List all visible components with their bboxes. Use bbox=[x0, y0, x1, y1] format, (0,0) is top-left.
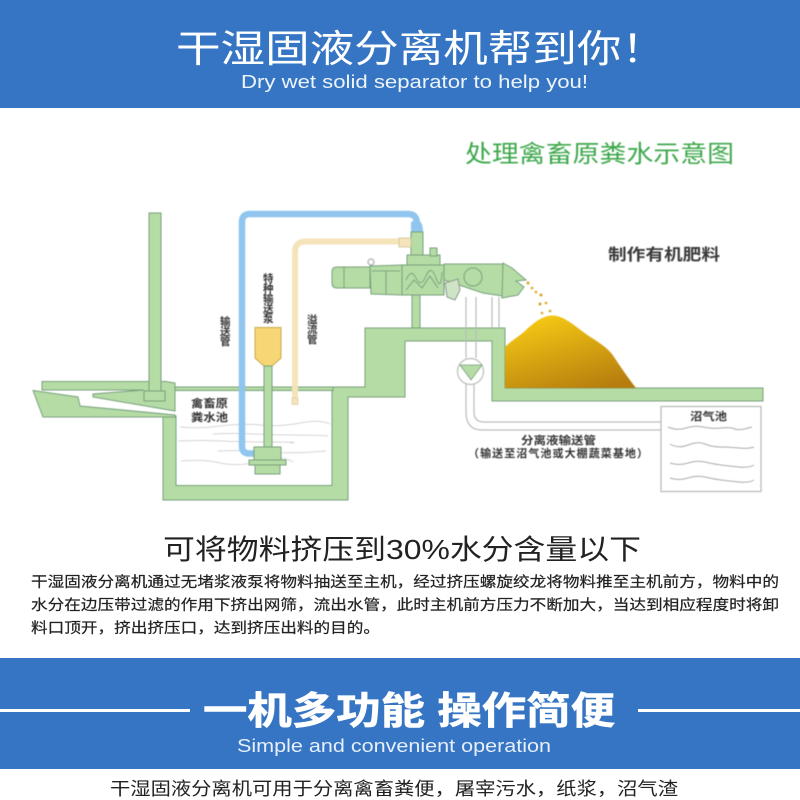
label: delivery pipe bbox=[220, 315, 231, 348]
water waves in tank bbox=[178, 421, 330, 465]
overflow pipe end cap bbox=[292, 398, 298, 404]
gearbox bbox=[370, 265, 402, 295]
biogas tank label: 沼气池 bbox=[690, 409, 727, 423]
description paragraph bbox=[31, 573, 779, 637]
footer text: 干湿固液分离机可用于分离禽畜粪便，屠宰污水，纸浆，沼气渣 bbox=[110, 779, 678, 799]
machine stand bbox=[412, 292, 420, 328]
motor band bbox=[343, 267, 345, 288]
description paragraph: 干湿固液分离机通过无堵浆液泵将物料抽送至主机，经过挤压螺旋绞龙将物料推至主机前方，物料中的 bbox=[31, 573, 779, 591]
label: special delivery pump: 送 bbox=[263, 302, 274, 315]
label: delivery pipe: 管 bbox=[220, 335, 230, 348]
tank and platform structure bbox=[163, 328, 763, 500]
label: special delivery pump bbox=[263, 272, 274, 325]
screw flights bbox=[406, 270, 442, 290]
label: separated liquid pipe: 分离液输送管 bbox=[521, 433, 596, 447]
pump foot bbox=[255, 465, 280, 474]
biogas tank bbox=[661, 406, 761, 492]
discharge head bbox=[502, 263, 526, 298]
delivery pump bbox=[249, 328, 286, 474]
banner subtitle: Simple and convenient operation bbox=[237, 736, 551, 756]
label: manure water tank bbox=[191, 396, 228, 424]
banner rule right bbox=[638, 709, 800, 712]
pump shaft bbox=[264, 366, 272, 447]
lower hopper bbox=[445, 279, 460, 300]
banner rule left bbox=[0, 709, 190, 712]
feed inlet bbox=[411, 232, 423, 256]
pump motor bbox=[254, 447, 281, 460]
label: make organic fertilizer: 制作有机肥料 bbox=[608, 246, 720, 264]
label: overflow pipe: 溢 bbox=[307, 313, 318, 326]
drive motor bbox=[332, 267, 370, 288]
header banner bbox=[0, 0, 800, 108]
pump flange bbox=[249, 460, 286, 465]
label: overflow pipe bbox=[307, 313, 318, 346]
tube opening bbox=[464, 268, 482, 286]
diagram title: 处理禽畜原粪水示意图 bbox=[465, 141, 734, 168]
label: delivery pipe: 输 bbox=[220, 315, 231, 328]
fertilizer pile bbox=[505, 316, 636, 388]
label: overflow pipe: 流 bbox=[307, 323, 318, 336]
label: manure water tank: 禽畜原 bbox=[191, 396, 228, 410]
label: delivery pipe: 送 bbox=[220, 325, 231, 338]
lifting ring bbox=[368, 259, 374, 265]
label: pipe destination: （输送至沼气池或大棚蔬菜基地） bbox=[468, 446, 648, 460]
label: overflow pipe: 管 bbox=[307, 333, 318, 346]
blue pipe outlet bbox=[411, 220, 423, 232]
lower banner bbox=[0, 658, 800, 769]
liquid pump symbol bbox=[458, 358, 484, 384]
separator machine bbox=[332, 232, 526, 328]
label: special delivery pump: 种 bbox=[263, 282, 274, 295]
top flange bbox=[407, 255, 440, 265]
falling fertilizer drops bbox=[526, 282, 551, 314]
top valve bbox=[430, 248, 437, 256]
banner title: 一机多功能 操作简便 bbox=[203, 691, 615, 733]
biogas tank waves bbox=[668, 426, 754, 482]
tall wall bbox=[149, 213, 161, 392]
gearbox detail bbox=[372, 271, 400, 294]
section heading: 可将物料挤压到30%水分含量以下 bbox=[163, 534, 641, 565]
screw housing bbox=[402, 265, 444, 295]
inlet connector bbox=[399, 238, 411, 247]
label: manure water tank: 粪水池 bbox=[191, 410, 228, 424]
description paragraph: 水分在边压带过滤的作用下挤出网筛，流出水管，此时主机前方压力不断加大，当达到相应程度时将卸 bbox=[31, 596, 779, 614]
wall base bbox=[144, 391, 165, 401]
label: special delivery pump: 泵 bbox=[263, 313, 274, 325]
cream overflow pipe bbox=[295, 242, 402, 404]
ground line bbox=[175, 387, 333, 390]
inlet channel lower bbox=[33, 390, 175, 417]
header title: 干湿固液分离机帮到你！ bbox=[176, 29, 666, 71]
diagram: livestock manure water treatment bbox=[33, 141, 763, 500]
description paragraph: 料口顶开，挤出挤压口，达到挤压出料的目的。 bbox=[31, 620, 380, 637]
header subtitle: Dry wet solid separator to help you! bbox=[241, 72, 588, 92]
label: special delivery pump: 特 bbox=[263, 272, 274, 285]
separated liquid pipes bbox=[466, 297, 661, 430]
blue delivery pipe bbox=[242, 214, 417, 454]
label: special delivery pump: 输 bbox=[263, 292, 274, 305]
press tube bbox=[444, 264, 503, 296]
pump housing bbox=[255, 328, 281, 366]
inlet channel upper bbox=[42, 382, 175, 411]
